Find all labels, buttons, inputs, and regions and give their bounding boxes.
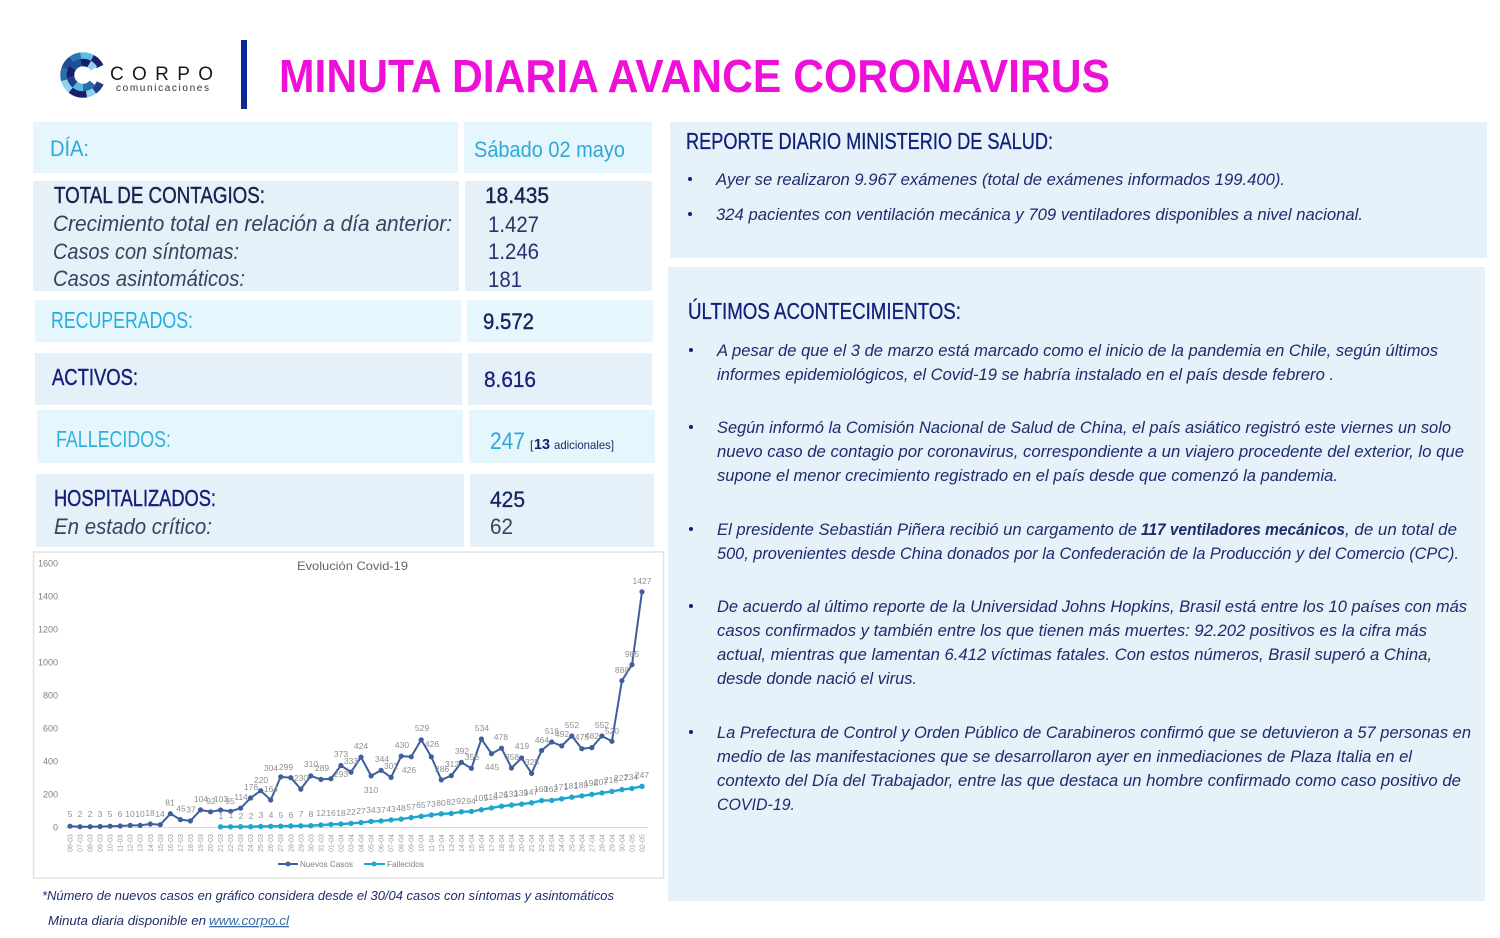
panel: hospitalizados: En estado crítico: <box>54 514 212 539</box>
x axis date labels: 28-04 <box>599 834 606 852</box>
data labels: Fallecidos: 57 <box>406 802 416 812</box>
panel: día <box>33 122 652 173</box>
data labels: Nuevos Casos: 426 <box>425 739 439 749</box>
x axis date labels: 29-04 <box>609 834 616 852</box>
data labels: Fallecidos: 207 <box>594 777 608 787</box>
bullet: exámenes: Ayer se realizaron 9.967 exámenes (total de exámenes informados 199.400). <box>715 170 1285 189</box>
data labels: Nuevos Casos: 445 <box>485 762 499 772</box>
data labels: Fallecidos: 116 <box>484 792 498 802</box>
data labels: Fallecidos: 171 <box>554 782 568 792</box>
x axis date labels: 08-04 <box>399 834 406 852</box>
data labels: Nuevos Casos: 430 <box>395 740 409 750</box>
data labels: Fallecidos: 160 <box>534 784 548 794</box>
x axis date labels <box>68 834 646 852</box>
data labels: Nuevos Casos: 81 <box>165 798 175 808</box>
panel: fallecidos: [ <box>530 438 534 452</box>
data labels: Fallecidos: 139 <box>514 788 528 798</box>
x axis date labels: 16-03 <box>168 834 175 852</box>
data labels: Fallecidos: 82 <box>446 797 456 807</box>
data labels: Fallecidos: 27 <box>356 806 366 816</box>
data labels: Nuevos Casos: 426 <box>402 765 416 775</box>
chart legend: Nuevos Casos <box>300 859 353 869</box>
data labels: Nuevos Casos: 475 <box>575 732 589 742</box>
bullet: Johns Hopkins: desde donde nació el virus. <box>717 669 917 688</box>
data labels: Nuevos Casos: 164 <box>264 784 278 794</box>
x axis date labels: 19-03 <box>198 834 205 852</box>
data labels: Nuevos Casos: 552 <box>565 720 579 730</box>
data labels: Nuevos Casos <box>68 576 652 819</box>
data labels: Nuevos Casos: 301 <box>384 761 398 771</box>
x axis date labels: 15-03 <box>158 834 165 852</box>
data labels: Fallecidos: 12 <box>316 808 326 818</box>
data labels: Nuevos Casos: 2 <box>78 809 83 819</box>
y axis labels: 200 <box>43 790 58 800</box>
data labels: Fallecidos: 133 <box>504 789 518 799</box>
data labels: Nuevos Casos: 299 <box>279 762 293 772</box>
bullet: ventiladores: 500, provenientes desde China donados por la Confederación de la Producción y del Comercio (CPC). <box>717 544 1459 563</box>
x axis date labels: 17-04 <box>489 834 496 852</box>
x axis date labels: 19-04 <box>509 834 516 852</box>
data labels: Nuevos Casos: 92 <box>206 796 216 806</box>
logo: Corpo Comunicaciones <box>64 56 213 94</box>
y axis labels: 1400 <box>38 592 58 602</box>
panel: total de contagios: TOTAL DE CONTAGIOS: <box>54 182 265 208</box>
panel: últimos acontecimientos <box>668 267 1485 901</box>
y axis labels: 1600 <box>38 558 58 568</box>
x axis date labels: 11-04 <box>429 835 436 852</box>
bullet: inicio de la pandemia: A pesar de que el 3 de marzo está marcado como el inicio de la pandemia en Chile, según últimos <box>716 341 1438 360</box>
bullet: Johns Hopkins: casos confirmados y también entre los que tienen más muertes: 92.202 positivos es la cifra más <box>717 621 1427 640</box>
chart footnote: *Número de nuevos casos en gráfico considera desde el 30/04 casos con síntomas y asintomáticos <box>42 888 614 903</box>
data labels: Nuevos Casos: 10 <box>125 809 135 819</box>
data labels: Fallecidos: 37 <box>376 805 386 815</box>
x axis date labels: 30-04 <box>619 834 626 852</box>
data labels: Fallecidos: 3 <box>259 810 264 820</box>
heading: últimos acontecimientos: ÚLTIMOS ACONTECIMIENTOS: <box>688 298 961 324</box>
data labels: Fallecidos: 34 <box>366 805 376 815</box>
panel: total de contagios: 181 <box>488 267 522 292</box>
data labels: Nuevos Casos: 3 <box>98 809 103 819</box>
data labels: Fallecidos: 5 <box>279 810 284 820</box>
x axis date labels: 08-03 <box>88 834 95 852</box>
data labels: Nuevos Casos: 552 <box>595 720 609 730</box>
data labels: Nuevos Casos: 356 <box>465 752 479 762</box>
x axis date labels: 25-03 <box>258 834 265 852</box>
y axis labels: 1000 <box>38 658 58 668</box>
bullet: ventilación: 324 pacientes con ventilación mecánica y 709 ventiladores disponibles a nivel nacional. <box>716 205 1363 224</box>
x axis date labels: 27-03 <box>278 834 285 852</box>
data labels: Fallecidos: 181 <box>564 781 578 791</box>
x axis date labels: 26-04 <box>579 834 586 852</box>
panel: hospitalizados <box>36 474 654 547</box>
header divider bar <box>241 40 247 109</box>
data labels: Fallecidos: 126 <box>494 790 508 800</box>
x axis date labels: 14-03 <box>148 834 155 852</box>
panel: recuperados: RECUPERADOS: <box>51 307 193 333</box>
y axis labels: 800 <box>43 690 58 700</box>
data labels: Fallecidos: 162 <box>544 784 558 794</box>
panel: fallecidos: FALLECIDOS: <box>56 426 171 452</box>
data labels: Nuevos Casos: 985 <box>625 649 639 659</box>
bullet: ventiladores: 117 ventiladores mecánicos <box>1141 520 1345 539</box>
panel: fallecidos: 247 <box>490 428 525 455</box>
data labels: Fallecidos: 16 <box>326 808 336 818</box>
data labels: Fallecidos: 80 <box>436 798 446 808</box>
x axis date labels: 09-03 <box>98 834 105 852</box>
data labels: Fallecidos: 73 <box>426 799 436 809</box>
data labels: Fallecidos: 234 <box>624 772 638 782</box>
x axis date labels: 01-05 <box>630 834 636 852</box>
data labels: Nuevos Casos: 478 <box>494 732 508 742</box>
data labels: Fallecidos: 189 <box>574 780 588 790</box>
bullet: ventiladores <box>689 520 1459 563</box>
x axis date labels: 05-04 <box>369 834 376 852</box>
x axis date labels: 07-03 <box>78 834 84 852</box>
data labels: Fallecidos: 6 <box>289 810 294 820</box>
x axis date labels: 31-03 <box>318 834 325 852</box>
data labels: Nuevos Casos: 344 <box>375 754 389 764</box>
data labels: Fallecidos: 8 <box>309 809 314 819</box>
x axis date labels: 13-03 <box>138 834 145 852</box>
data labels: Nuevos Casos: 492 <box>555 729 569 739</box>
data labels: Nuevos Casos: 358 <box>505 752 519 762</box>
panel: recuperados: 9.572 <box>483 309 534 334</box>
bullet: inicio de la pandemia <box>689 341 1438 384</box>
x axis date labels: 25-04 <box>569 834 576 852</box>
data labels: Fallecidos: 247 <box>635 770 649 780</box>
data labels: Fallecidos: 65 <box>416 800 426 810</box>
data labels: Fallecidos: 105 <box>474 793 488 803</box>
panel: total de contagios: 1.427 <box>488 212 539 237</box>
data labels: Nuevos Casos: 95 <box>225 796 235 806</box>
data labels: Fallecidos: 22 <box>346 807 356 817</box>
data labels: Nuevos Casos: 310 <box>364 785 378 795</box>
data labels: Fallecidos: 216 <box>604 775 618 785</box>
y axis labels: 600 <box>43 724 58 734</box>
x axis date labels: 06-03 <box>68 834 74 852</box>
bullet: China: Según informó la Comisión Nacional de Salud de China, el país asiático registró este viernes un solo <box>717 418 1451 437</box>
chart legend <box>278 859 424 869</box>
x axis date labels: 07-04 <box>389 834 396 852</box>
data labels: Nuevos Casos: 230 <box>294 773 308 783</box>
data labels: Nuevos Casos: 2 <box>88 809 93 819</box>
data labels: Fallecidos: 2 <box>249 811 254 821</box>
data labels: Fallecidos: 147 <box>524 787 538 797</box>
data labels: Nuevos Casos: 333 <box>344 756 358 766</box>
panel: activos <box>35 353 652 405</box>
bullet: Carabineros: medio de las manifestaciones que se desarrollaron ayer en inmediaciones de Plaza Italia en el <box>717 747 1413 766</box>
x axis date labels: 10-03 <box>108 834 115 852</box>
x axis date labels: 10-04 <box>419 834 426 852</box>
x axis date labels: 18-04 <box>499 834 506 852</box>
title: MINUTA DIARIA AVANCE CORONAVIRUS <box>279 50 1110 102</box>
source link line <box>48 913 290 928</box>
logo: Corpo Comunicaciones: CORPO <box>110 64 213 85</box>
logo: Corpo Comunicaciones: comunicaciones <box>116 83 209 94</box>
x axis date labels: 27-04 <box>589 834 596 852</box>
bullet: Carabineros: La Prefectura de Control y Orden Público de Carabineros confirmó que se detuvieron a 57 personas en <box>717 723 1471 742</box>
data labels: Fallecidos: 43 <box>386 804 396 814</box>
x axis date labels: 04-04 <box>358 834 366 852</box>
panel: total de contagios: Crecimiento total en relación a día anterior: <box>53 211 452 236</box>
data labels: Fallecidos: 94 <box>466 796 476 806</box>
data labels: Fallecidos: 48 <box>396 803 406 813</box>
x axis date labels: 03-04 <box>348 834 356 852</box>
chart title: Evolución Covid-19 <box>297 559 408 573</box>
panel: activos: ACTIVOS: <box>52 364 138 390</box>
y axis labels: 0 <box>53 822 58 832</box>
data labels: Fallecidos <box>219 770 649 821</box>
heading: reporte diario: REPORTE DIARIO MINISTERIO DE SALUD: <box>686 128 1053 154</box>
data labels: Nuevos Casos: 464 <box>535 735 549 745</box>
data labels: Nuevos Casos: 1427 <box>633 576 652 586</box>
source link line: Minuta diaria disponible en <box>48 913 206 928</box>
panel: reporte diario ministerio de salud <box>670 122 1487 258</box>
data labels: Nuevos Casos: 516 <box>545 726 559 736</box>
data labels: Fallecidos: 4 <box>269 810 274 820</box>
x axis date labels: 30-03 <box>308 834 315 852</box>
data labels: Nuevos Casos: 304 <box>264 763 278 773</box>
bullet: Johns Hopkins: De acuerdo al último reporte de la Universidad Johns Hopkins, Brasil está entre los 10 países con más <box>717 597 1467 616</box>
x axis date labels: 01-04 <box>328 834 335 852</box>
x axis date labels: 02-05 <box>640 834 646 852</box>
data labels: Nuevos Casos: 6 <box>118 809 123 819</box>
panel: total de contagios: Casos con síntomas: <box>53 239 239 264</box>
x axis date labels: 22-03 <box>228 834 235 852</box>
panel: hospitalizados: 62 <box>490 514 513 539</box>
data labels: Fallecidos: 2 <box>239 811 244 821</box>
x axis date labels: 29-03 <box>298 834 305 852</box>
data labels: Fallecidos: 18 <box>336 808 346 818</box>
x axis date labels: 16-04 <box>479 834 486 852</box>
bullet: Carabineros: contexto del Día del Trabajador, entre las que destaca un hombre confirmado como caso positivo de <box>717 771 1461 790</box>
x axis date labels: 23-04 <box>549 834 556 852</box>
data labels: Fallecidos: 1 <box>229 810 234 820</box>
x axis date labels: 20-03 <box>208 834 215 852</box>
data labels: Nuevos Casos: 424 <box>354 741 368 751</box>
line series: Nuevos Casos <box>70 592 642 827</box>
x axis date labels: 13-04 <box>449 834 456 852</box>
x axis date labels: 09-04 <box>409 834 416 852</box>
y axis labels: 400 <box>43 756 58 766</box>
x axis date labels: 02-04 <box>338 834 345 852</box>
data labels: Nuevos Casos: 419 <box>515 741 529 751</box>
data labels: Fallecidos: 198 <box>584 778 598 788</box>
x axis date labels: 17-03 <box>178 834 185 852</box>
data labels: Nuevos Casos: 289 <box>315 763 329 773</box>
data labels: Fallecidos: 7 <box>299 809 304 819</box>
x axis date labels: 28-03 <box>288 834 295 852</box>
data labels: Nuevos Casos: 220 <box>254 775 268 785</box>
x axis date labels: 15-04 <box>469 834 476 852</box>
bullet: Carabineros <box>689 723 1471 814</box>
x axis date labels: 22-04 <box>539 834 546 852</box>
data labels: Nuevos Casos: 14 <box>155 809 165 819</box>
data labels: Fallecidos: 1 <box>219 811 224 821</box>
bullet: China <box>689 418 1464 485</box>
x axis date labels: 18-03 <box>188 834 195 852</box>
data labels: Nuevos Casos: 293 <box>334 769 348 779</box>
bullet: inicio de la pandemia: informes epidemiológicos, el Covid-19 se habría instalado en el país desde febrero . <box>717 365 1334 384</box>
bullet: Carabineros: COVID-19. <box>717 795 795 814</box>
panel: fallecidos <box>37 410 655 463</box>
data labels: Nuevos Casos: 286 <box>435 764 449 774</box>
data labels: Nuevos Casos: 534 <box>475 723 489 733</box>
data labels: Nuevos Casos: 45 <box>176 804 186 814</box>
data labels: Nuevos Casos: 888 <box>615 665 629 675</box>
x axis date labels: 24-03 <box>248 834 255 852</box>
panel: fallecidos: 13 <box>534 436 550 453</box>
x axis date labels: 06-04 <box>379 834 386 852</box>
x axis date labels: 12-04 <box>439 834 446 852</box>
data labels: Nuevos Casos: 10 <box>135 809 145 819</box>
panel: activos: 8.616 <box>484 367 536 392</box>
source link line: www.corpo.cl <box>209 913 290 928</box>
data labels: Nuevos Casos: 104 <box>194 794 208 804</box>
panel: hospitalizados: 425 <box>490 487 525 512</box>
y axis labels: 1200 <box>38 624 58 634</box>
x axis date labels: 24-04 <box>559 834 566 852</box>
line series: Fallecidos <box>220 786 642 827</box>
chart: Evolución Covid-19 <box>34 552 664 878</box>
data labels: Nuevos Casos: 5 <box>108 809 113 819</box>
bullet: China: supone el menor crecimiento registrado en el país desde que comenzó la pandemia. <box>717 466 1338 485</box>
x axis date labels: 12-03 <box>128 834 135 852</box>
data labels: Fallecidos: 227 <box>614 773 628 783</box>
bullet: Johns Hopkins <box>689 597 1467 688</box>
bullet: ventiladores: El presidente Sebastián Piñera recibió un cargamento de <box>717 520 1137 539</box>
panel: fallecidos: adicionales] <box>554 438 614 452</box>
data labels: Nuevos Casos: 310 <box>304 759 318 769</box>
data labels: Nuevos Casos: 103 <box>214 794 228 804</box>
data labels: Nuevos Casos: 482 <box>585 731 599 741</box>
x axis date labels: 11-03 <box>118 835 125 852</box>
panel: total de contagios <box>33 181 652 292</box>
x axis date labels: 21-03 <box>218 834 225 852</box>
panel: total de contagios: 1.246 <box>488 239 539 264</box>
panel: total de contagios: Casos asintomáticos: <box>53 266 245 291</box>
data labels: Nuevos Casos: 325 <box>525 757 539 767</box>
y axis labels <box>38 558 58 832</box>
panel: recuperados <box>35 300 653 342</box>
x axis date labels: 21-04 <box>529 834 536 852</box>
data labels: Nuevos Casos: 520 <box>605 726 619 736</box>
chart legend: Fallecidos <box>387 859 424 869</box>
data labels: Nuevos Casos: 37 <box>186 804 196 814</box>
data labels: Nuevos Casos: 529 <box>415 723 429 733</box>
panel: hospitalizados: HOSPITALIZADOS: <box>54 485 216 511</box>
bullet: China: nuevo caso de contagio por coronavirus, correspondiente a un viajero procedente del exterior, lo que <box>717 442 1464 461</box>
x axis date labels: 20-04 <box>519 834 526 852</box>
data labels: Nuevos Casos: 373 <box>334 749 348 759</box>
data labels: Nuevos Casos: 18 <box>145 808 155 818</box>
data labels: Nuevos Casos: 176 <box>244 782 258 792</box>
panel: día: Sábado 02 mayo <box>474 137 625 162</box>
data labels: Nuevos Casos: 312 <box>445 759 459 769</box>
data labels: Nuevos Casos: 114 <box>234 792 248 802</box>
x axis date labels: 26-03 <box>268 834 275 852</box>
data labels: Nuevos Casos: 392 <box>455 746 469 756</box>
bullet: ventiladores: , de un total de <box>1345 520 1457 539</box>
bullet: Johns Hopkins: actual, mientras que lamentan 6.412 víctimas fatales. Con estos números, Brasil superó a China, <box>717 645 1432 664</box>
x axis date labels: 14-04 <box>459 834 466 852</box>
panel: día: DÍA: <box>50 136 89 161</box>
data labels: Nuevos Casos: 5 <box>68 809 73 819</box>
panel: total de contagios: 18.435 <box>485 183 549 208</box>
data labels: Fallecidos: 92 <box>456 796 466 806</box>
x axis date labels: 23-03 <box>238 834 245 852</box>
